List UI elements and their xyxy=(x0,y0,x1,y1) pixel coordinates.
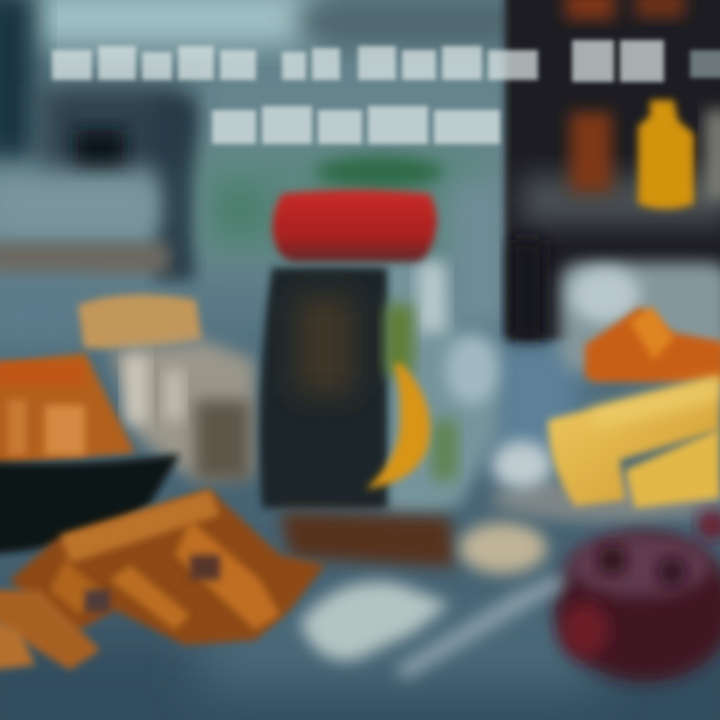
spoon xyxy=(395,573,565,680)
bottle: pale right edge xyxy=(705,110,720,200)
red lid xyxy=(273,190,437,262)
crackers xyxy=(0,490,325,670)
left stack of snacks xyxy=(0,295,255,554)
brown wooden bar xyxy=(280,512,455,567)
bottle: orange top right xyxy=(635,0,685,18)
grapes xyxy=(555,511,720,682)
title: illegible blurred lettering xyxy=(52,40,720,144)
shelf with bottles xyxy=(505,0,720,340)
bottle: yellow xyxy=(638,100,694,209)
cream piece xyxy=(459,522,547,574)
white powder xyxy=(300,582,450,661)
glass right side xyxy=(384,262,499,514)
right glass with orange pieces xyxy=(560,262,720,382)
white highlight on plate xyxy=(492,441,552,489)
jar xyxy=(260,190,499,514)
bottle: orange top xyxy=(565,0,615,20)
orange sticks xyxy=(0,353,135,465)
banana xyxy=(366,362,430,489)
yellow cheese sticks xyxy=(548,375,720,508)
black bowl xyxy=(0,454,180,554)
jar dark label xyxy=(260,268,387,508)
bread slice xyxy=(78,295,202,349)
bottle: amber xyxy=(570,112,612,192)
plate xyxy=(490,478,720,522)
grey-white wafers xyxy=(110,340,255,480)
green strip xyxy=(385,305,413,375)
